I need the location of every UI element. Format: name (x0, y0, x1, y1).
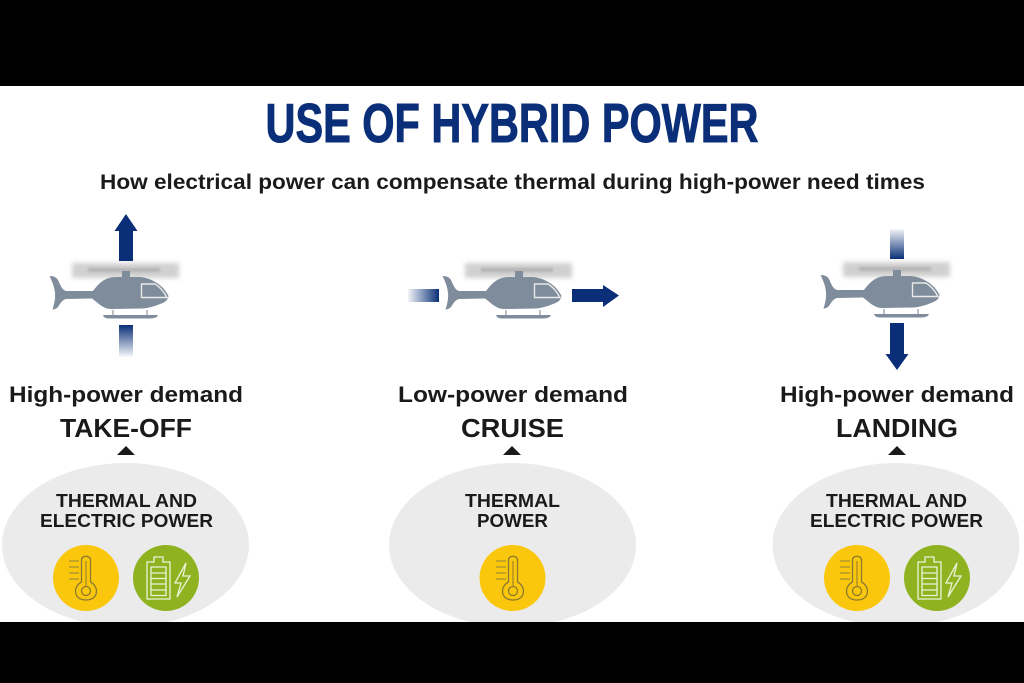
panel: cruise (389, 263, 636, 627)
demand label: take-off: High-power demand (9, 382, 243, 407)
top black band (0, 0, 1024, 86)
power label: thermal and electric (40, 491, 213, 531)
power label: thermal: THERMAL (465, 491, 560, 511)
power label: thermal and electric: THERMAL AND (56, 491, 197, 511)
title: USE OF HYBRID POWER (266, 92, 758, 154)
phase label: take-off: TAKE-OFF (60, 415, 192, 443)
icon: thermometer (824, 545, 890, 611)
power bubble: thermal and electric (772, 463, 1020, 627)
power label: thermal (465, 491, 560, 531)
power bubble: thermal (389, 463, 636, 627)
panel: take-off (2, 214, 249, 627)
power label: thermal and electric: ELECTRIC POWER (810, 511, 983, 531)
subtitle: How electrical power can compensate thermal during high-power need times (100, 171, 925, 194)
bottom black band (0, 622, 1024, 683)
icon: helicopter take-off (50, 263, 179, 318)
pointer (888, 446, 906, 455)
power label: thermal: POWER (477, 511, 548, 531)
panel: landing (772, 229, 1020, 627)
demand label: cruise: Low-power demand (398, 382, 628, 407)
pointer (503, 446, 521, 455)
icon: helicopter landing (820, 262, 950, 318)
pointer (117, 446, 135, 455)
icon: battery (133, 545, 199, 611)
icon: thermometer (480, 545, 546, 611)
icon: helicopter cruise (442, 263, 572, 318)
power label: thermal and electric: ELECTRIC POWER (40, 511, 213, 531)
demand label: landing: High-power demand (780, 382, 1014, 407)
arrow: forward thrust (572, 285, 619, 307)
arrow: downward thrust (886, 323, 908, 370)
power label: thermal and electric: THERMAL AND (826, 491, 967, 511)
icon: thermometer (53, 545, 119, 611)
arrow: fading trail above (890, 229, 904, 259)
phase label: landing: LANDING (836, 415, 958, 443)
icon: battery (904, 545, 970, 611)
arrow: fading trail below (119, 325, 133, 357)
power bubble: thermal and electric (2, 463, 249, 627)
phase label: cruise: CRUISE (461, 415, 564, 443)
arrow: upward thrust (114, 214, 138, 261)
power label: thermal and electric (810, 491, 983, 531)
arrow: fading trail behind (408, 289, 439, 302)
